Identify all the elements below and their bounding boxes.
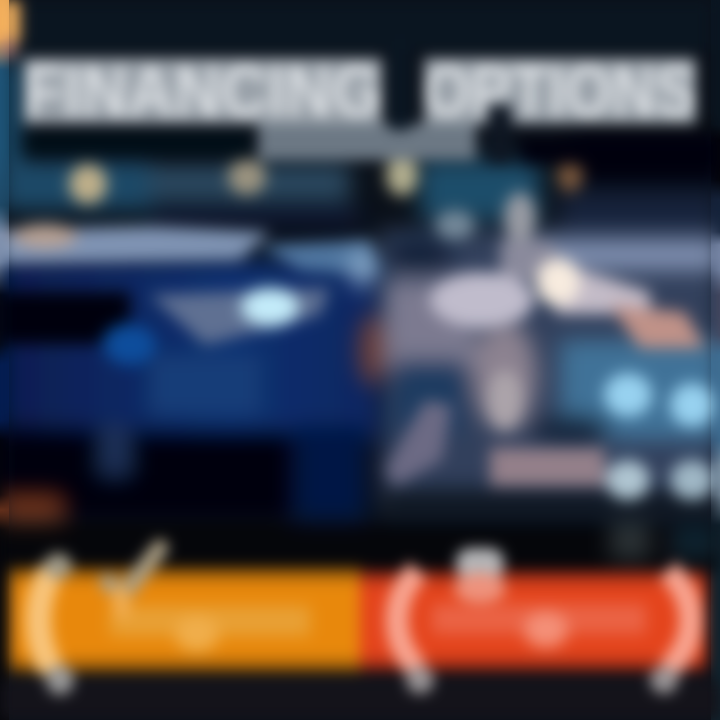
icon: orange checkmark — [108, 548, 160, 610]
title — [24, 38, 696, 165]
red option label — [432, 604, 646, 648]
title: FINANCING — [24, 52, 382, 132]
panel: red option — [360, 548, 706, 694]
icon: corner logo — [0, 0, 20, 58]
illustration: blue car — [0, 224, 380, 522]
orange option label — [110, 606, 310, 652]
background lights — [69, 154, 583, 204]
red option tab — [454, 548, 506, 603]
panel: orange option — [10, 548, 362, 695]
headlight — [241, 288, 299, 326]
subtitle band — [25, 132, 720, 164]
red option rings — [397, 570, 690, 694]
illustration: silver car — [350, 192, 720, 520]
orange option ring — [38, 553, 74, 695]
bright highlight — [536, 258, 580, 306]
